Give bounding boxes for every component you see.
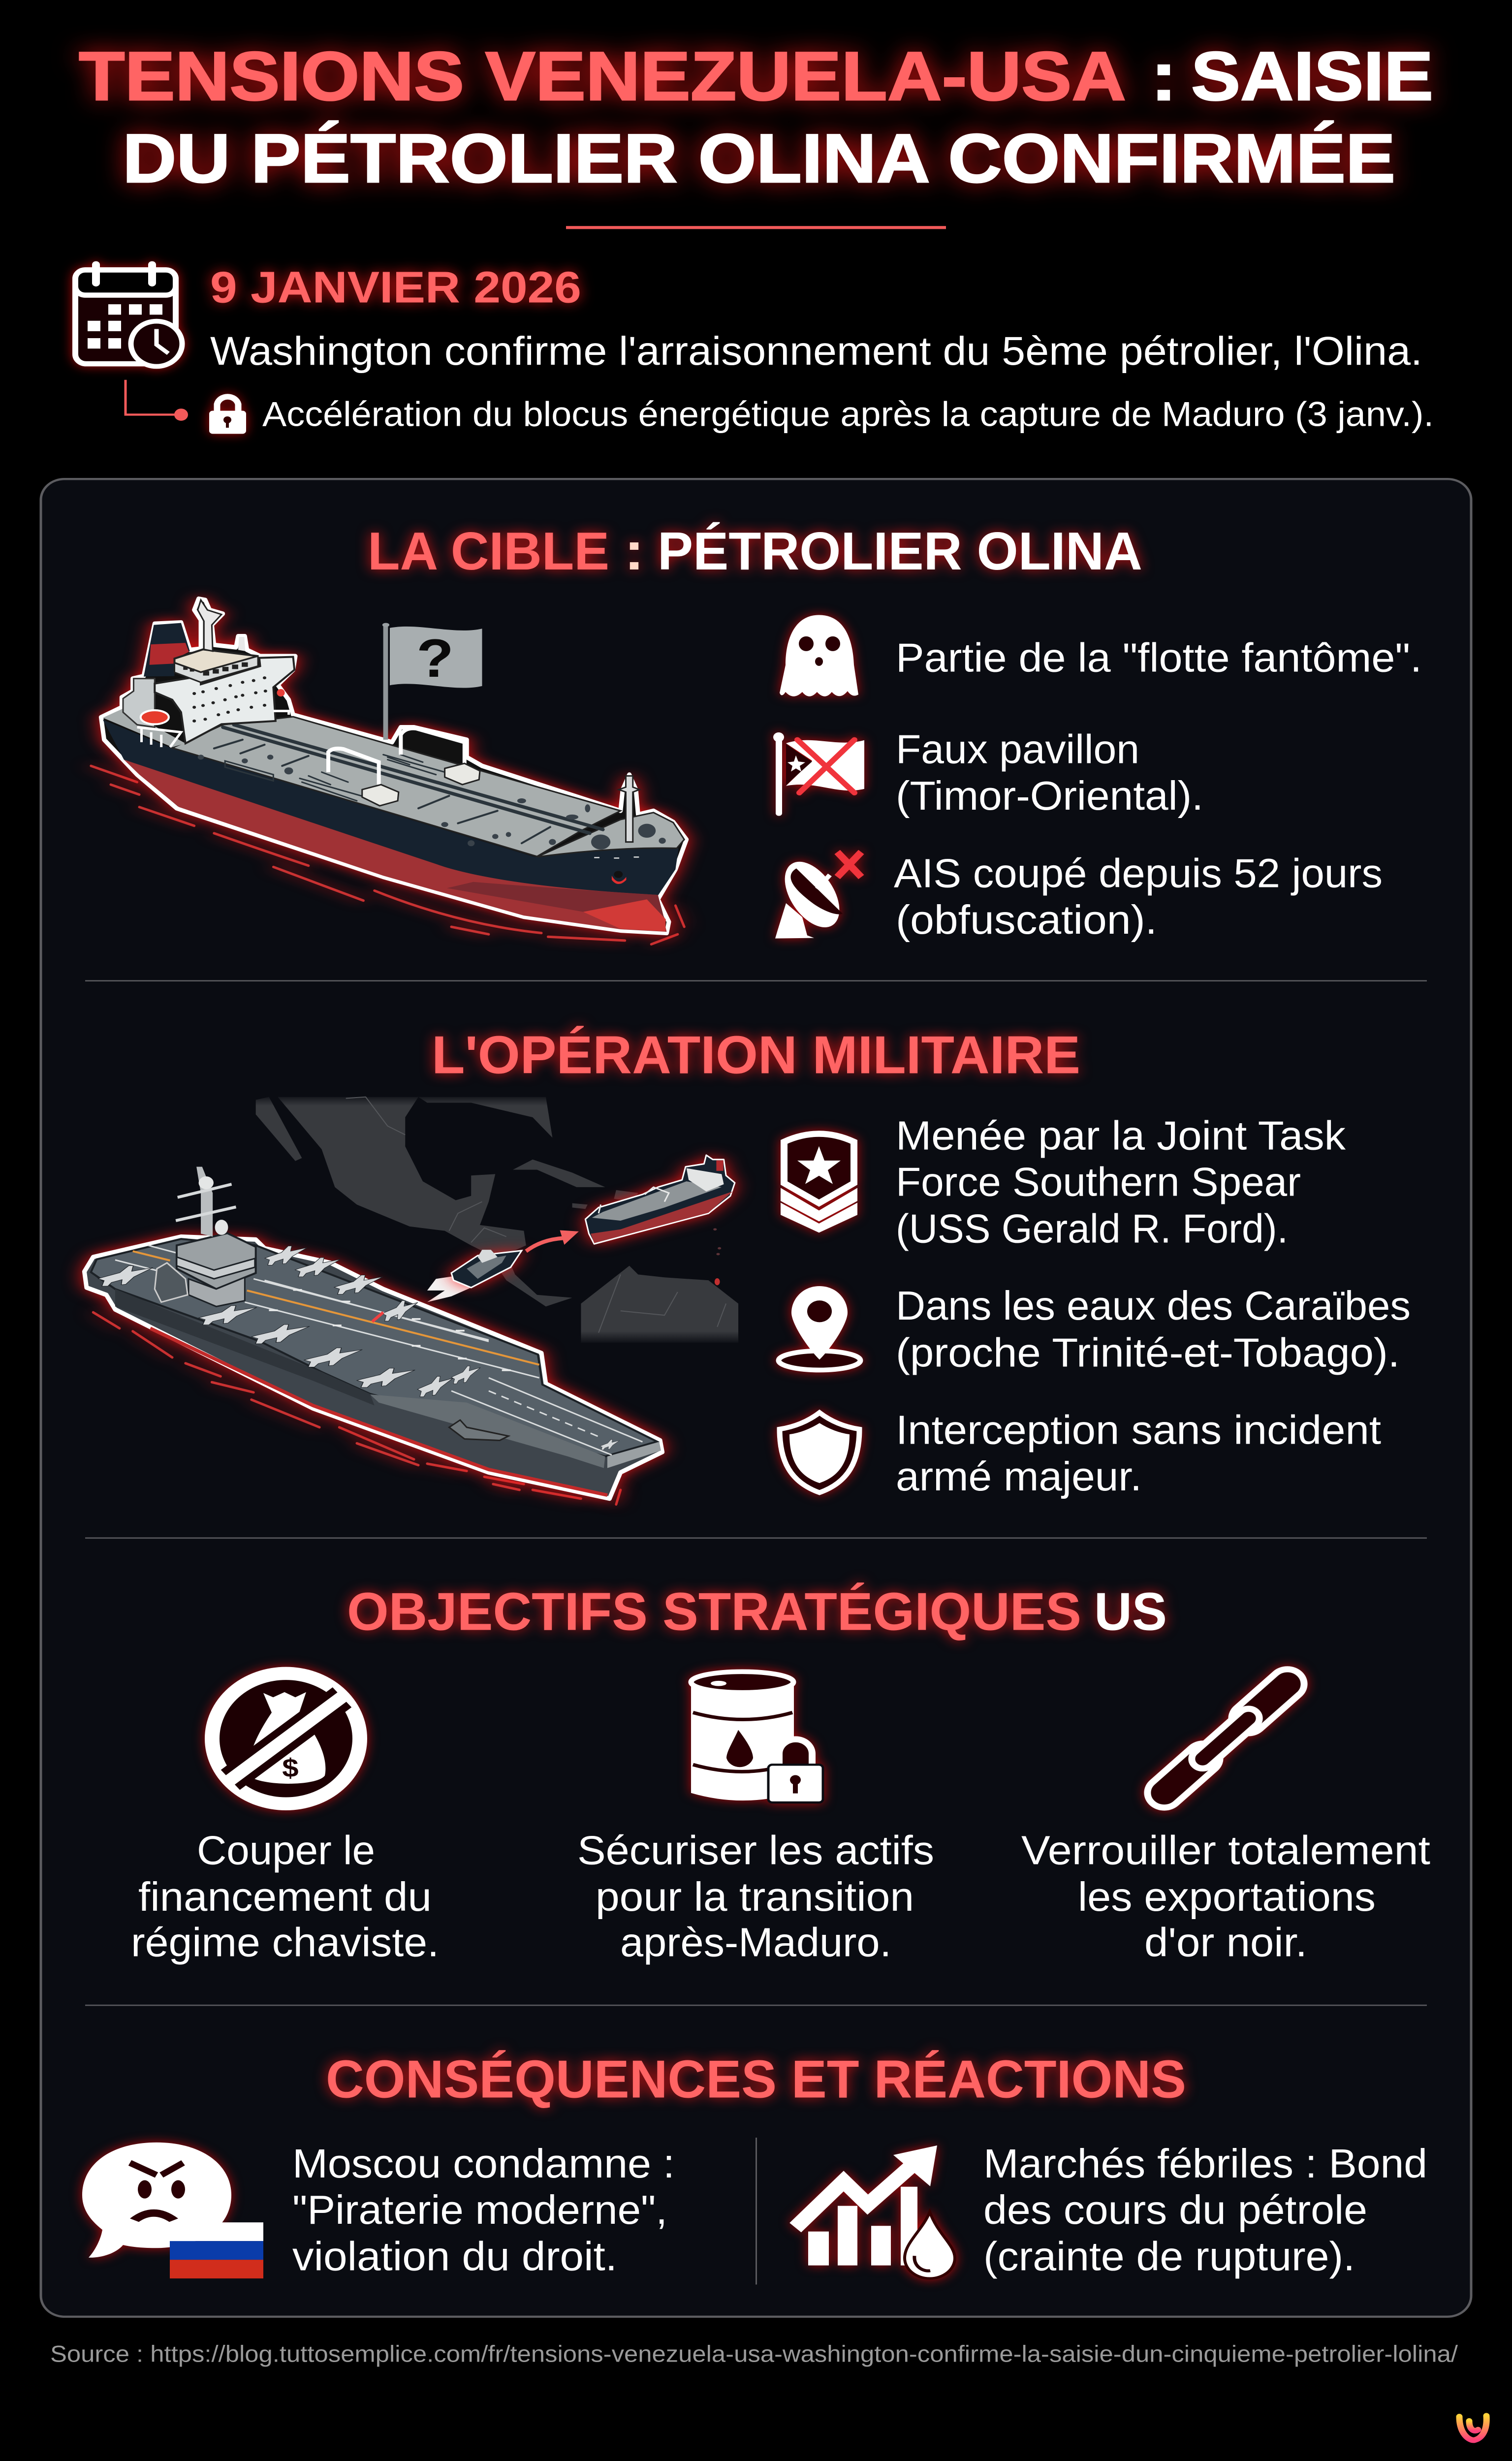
carrier hull bbox=[93, 1312, 621, 1505]
text: couper: financement du bbox=[138, 1874, 432, 1920]
text: verrouiller: d'or noir. bbox=[1144, 1920, 1307, 1965]
text: joint task force: Force Southern Spear bbox=[896, 1159, 1301, 1204]
text: couper: Couper le bbox=[197, 1828, 375, 1873]
icon: shield bbox=[780, 1413, 859, 1492]
text: sécuriser: pour la transition bbox=[596, 1874, 914, 1920]
sub-headline: Accélération du blocus énergétique après la capture de Maduro (3 janv.). bbox=[262, 395, 1434, 433]
icon: rising chart with oil drop bbox=[795, 2145, 955, 2278]
icon: satellite dish with cross bbox=[774, 854, 859, 939]
source line: Source : https://blog.tuttosemplice.com/fr/tensions-venezuela-usa-washington-confirme-la-saisie-dun-cinquieme-petrolier-lolina/ bbox=[50, 2341, 1458, 2367]
text: joint task force bbox=[896, 1113, 1346, 1252]
superstructure bbox=[123, 679, 155, 727]
icon: false flag bbox=[773, 732, 864, 816]
text: joint task force: (USS Gerald R. Ford). bbox=[896, 1206, 1288, 1252]
text: caraïbes: Dans les eaux des Caraïbes bbox=[896, 1283, 1411, 1328]
heading: la cible: PÉTROLIER OLINA bbox=[658, 521, 1142, 581]
wake bbox=[427, 1276, 478, 1302]
title: DU PÉTROLIER OLINA CONFIRMÉE bbox=[123, 120, 1395, 197]
heading: la cible: LA CIBLE bbox=[368, 521, 609, 581]
text: interception: Interception sans incident bbox=[896, 1407, 1381, 1452]
headline sentence: Washington confirme l'arraisonnement du 5ème pétrolier, l'Olina. bbox=[210, 329, 1422, 374]
intercept arrow bbox=[526, 1238, 564, 1251]
text: faux pavillon: (Timor-Oriental). bbox=[896, 773, 1203, 819]
island bbox=[177, 1233, 256, 1289]
icon: military rank bbox=[781, 1134, 857, 1232]
text: moscou: "Piraterie moderne", bbox=[292, 2187, 667, 2233]
title: TENSIONS VENEZUELA-USA bbox=[79, 37, 1126, 115]
icon: lock bbox=[209, 397, 246, 434]
heading: la cible: : bbox=[624, 521, 644, 581]
icon: location pin bbox=[779, 1286, 860, 1370]
text: moscou: Moscou condamne : bbox=[292, 2141, 675, 2186]
text: marchés: (crainte de rupture). bbox=[983, 2233, 1355, 2279]
icon: calendar with clock bbox=[75, 261, 182, 366]
deck aircraft bbox=[98, 1246, 620, 1450]
text: faux pavillon: Faux pavillon bbox=[896, 726, 1139, 772]
heading: l'opération militaire: L'OPÉRATION MILITAIRE bbox=[432, 1025, 1080, 1085]
small tanker bbox=[585, 1155, 735, 1244]
text: AIS: (obfuscation). bbox=[896, 897, 1157, 943]
title: SAISIE bbox=[1191, 37, 1433, 115]
icon: chain bbox=[1140, 1663, 1311, 1814]
heading: objectifs stratégiques: US bbox=[1094, 1581, 1167, 1641]
icon: angry speech bubble and Russian flag bbox=[82, 2143, 263, 2278]
text: sécuriser: Sécuriser les actifs bbox=[577, 1828, 934, 1873]
icon: oil barrel with lock bbox=[691, 1672, 823, 1802]
text: marchés: Marchés fébriles : Bond bbox=[983, 2141, 1427, 2186]
text: sécuriser bbox=[577, 1828, 934, 1965]
text: flotte fantôme: Partie de la "flotte fantôme". bbox=[896, 634, 1422, 680]
map of Caribbean bbox=[256, 1097, 738, 1343]
text: verrouiller: Verrouiller totalement bbox=[1021, 1828, 1430, 1873]
text: AIS bbox=[894, 850, 1383, 943]
connector arrow bbox=[126, 380, 188, 421]
heading: la cible bbox=[368, 521, 1142, 581]
text: AIS: AIS coupé depuis 52 jours bbox=[894, 850, 1383, 896]
text: verrouiller: les exportations bbox=[1078, 1874, 1376, 1920]
date: 9 JANVIER 2026 bbox=[210, 263, 581, 312]
icon: no money bbox=[212, 1673, 360, 1804]
title bbox=[79, 37, 1433, 197]
logo bbox=[1459, 2416, 1486, 2440]
text: interception: armé majeur. bbox=[896, 1453, 1142, 1499]
icon: ghost bbox=[780, 615, 858, 696]
illustration: map, aircraft carrier, intercept bbox=[84, 1094, 738, 1505]
fore mast bbox=[619, 776, 639, 842]
text: sécuriser: après-Maduro. bbox=[620, 1920, 891, 1965]
flag pole bbox=[383, 625, 388, 740]
heading: objectifs stratégiques: OBJECTIFS STRATÉGIQUES bbox=[347, 1581, 1081, 1641]
text: faux pavillon bbox=[896, 726, 1203, 819]
text: caraïbes bbox=[896, 1283, 1411, 1375]
text: marchés: des cours du pétrole bbox=[983, 2187, 1367, 2233]
icon: no money: $ bbox=[282, 1753, 299, 1782]
text: marchés bbox=[983, 2141, 1427, 2279]
panel: main card bbox=[41, 479, 1471, 2317]
title: : bbox=[1151, 37, 1177, 115]
heading: conséquences: CONSÉQUENCES ET RÉACTIONS bbox=[326, 2049, 1186, 2109]
text: moscou bbox=[292, 2141, 675, 2279]
flag question mark: ? bbox=[416, 628, 454, 688]
text: moscou: violation du droit. bbox=[292, 2233, 617, 2279]
illustration: oil tanker with flag bbox=[91, 599, 687, 944]
speedboat bbox=[451, 1251, 522, 1288]
text: joint task force: Menée par la Joint Task bbox=[896, 1113, 1346, 1159]
manifolds bbox=[328, 728, 465, 785]
text: verrouiller bbox=[1021, 1828, 1430, 1965]
text: caraïbes: (proche Trinité-et-Tobago). bbox=[896, 1330, 1400, 1375]
text: couper bbox=[131, 1828, 439, 1965]
text: couper: régime chaviste. bbox=[131, 1920, 439, 1965]
text: interception bbox=[896, 1407, 1381, 1499]
